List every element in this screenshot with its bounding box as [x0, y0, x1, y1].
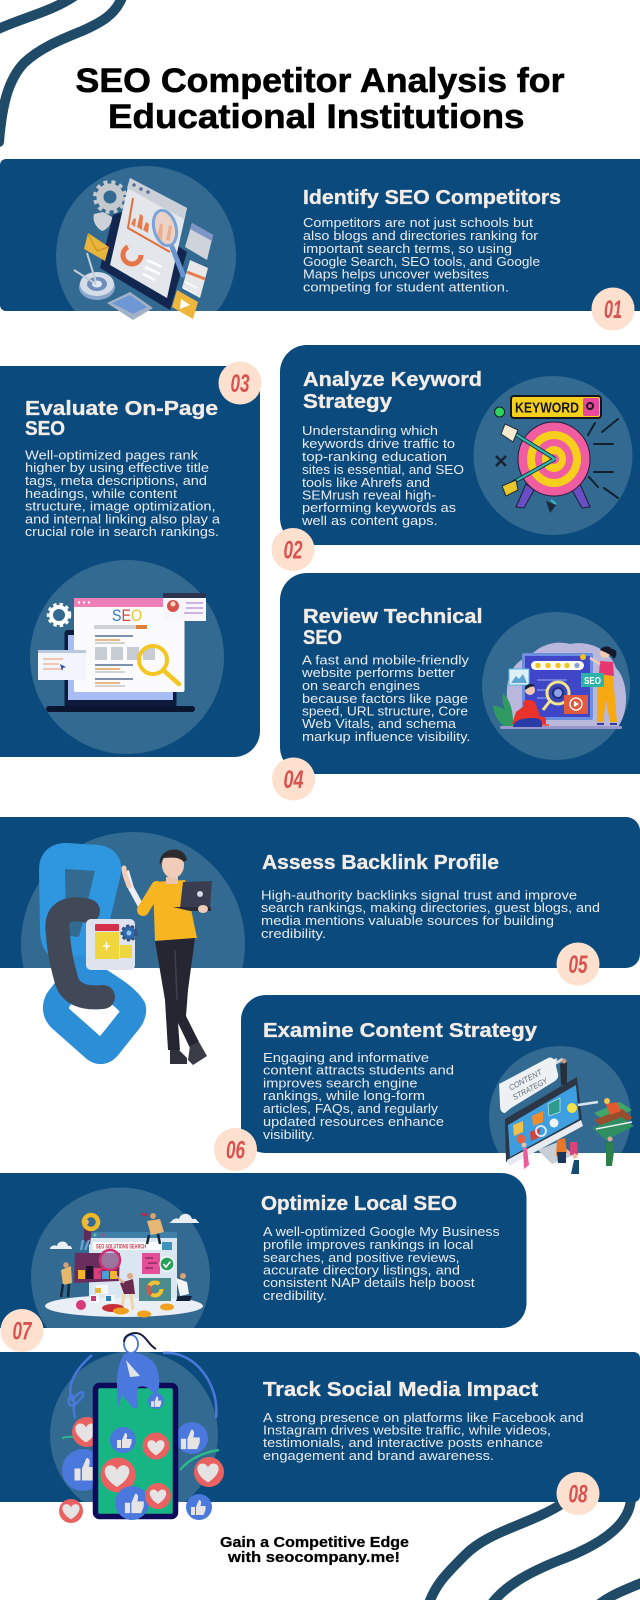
text block: Well-optimized pages rank	[25, 448, 199, 462]
heading	[25, 398, 218, 440]
text block: rankings, while long-form	[263, 1088, 425, 1103]
icon: SEO laptop illustration: SEO	[112, 606, 142, 625]
closing call to action	[220, 1535, 409, 1566]
text block: SEMrush reveal high-	[302, 488, 436, 502]
number badge 03	[218, 362, 262, 404]
text block: performing keywords as	[302, 500, 457, 515]
text block: search rankings, making directories, guest blogs, and	[261, 900, 600, 915]
decorative swirl: bottom right	[428, 1498, 640, 1600]
text block: credibility.	[263, 1288, 327, 1303]
number badge 06: 06	[226, 1136, 246, 1164]
number badge 03: 03	[230, 370, 250, 398]
text block: and internal linking also play a	[25, 512, 221, 526]
number badge 07: 07	[12, 1318, 32, 1346]
text block: tags, meta descriptions, and	[25, 473, 207, 488]
text block: updated resources enhance	[263, 1114, 444, 1129]
panel: 03 evaluate on-page SEO	[0, 362, 262, 757]
heading: SEO	[25, 418, 65, 440]
heading: Track Social Media Impact	[263, 1379, 538, 1401]
text block: consistent NAP details help boost	[263, 1275, 475, 1290]
text block: competing for student attention.	[303, 280, 509, 294]
heading: Review Technical	[303, 606, 482, 628]
icon: local SEO search illustration: SEO SOLUTIONS SEARCH	[96, 1244, 146, 1250]
icon: keyword target illustration	[495, 396, 618, 513]
icon: content strategy illustration: STRATEGY	[511, 1076, 550, 1102]
text block: visibility.	[263, 1127, 315, 1142]
heading	[303, 369, 482, 413]
panel: 08 track social media impact	[0, 1333, 640, 1523]
text block	[261, 888, 600, 941]
text block: Competitors are not just schools but	[303, 215, 533, 230]
text block	[263, 1410, 584, 1463]
text block: searches, and positive reviews,	[263, 1250, 460, 1265]
text block: Web Vitals, and schema	[302, 716, 457, 731]
heading	[303, 606, 482, 649]
icon: local SEO search illustration	[45, 1212, 203, 1318]
icon: keyword target illustration: KEYWORD	[515, 400, 579, 416]
text block	[303, 215, 540, 294]
text block: keywords drive traffic to	[302, 436, 455, 451]
heading: Identify SEO Competitors	[303, 187, 561, 209]
text block: also blogs and directories ranking for	[303, 228, 539, 243]
text block: crucial role in search rankings.	[25, 524, 219, 539]
title: SEO Competitor Analysis for	[76, 62, 564, 100]
text block: A strong presence on platforms like Facebook and	[263, 1410, 584, 1425]
title: Educational Institutions	[108, 98, 524, 136]
text block: accurate directory listings, and	[263, 1262, 460, 1278]
icon: content strategy illustration	[499, 1058, 634, 1174]
text block: High-authority backlinks signal trust and improve	[261, 888, 577, 902]
text block	[263, 1050, 454, 1142]
text block: content attracts students and	[263, 1062, 454, 1078]
text block: testimonials, and interactive posts enhance	[263, 1435, 543, 1450]
number badge 08	[556, 1472, 600, 1515]
text block: speed, URL structure, Core	[302, 704, 468, 718]
text block: A well-optimized Google My Business	[263, 1224, 500, 1239]
icon: SEO laptop illustration	[38, 593, 206, 712]
text block: website performs better	[301, 665, 456, 680]
panel: 05 assess backlink profile	[0, 817, 640, 1065]
number badge 04: 04	[284, 766, 304, 794]
panel: 04 review technical SEO	[272, 573, 640, 800]
number badge 06	[214, 1128, 257, 1171]
closing call to action: with seocompany.me!	[227, 1550, 400, 1566]
text block: improves search engine	[263, 1076, 418, 1090]
decorative swirl: top left	[0, 0, 123, 142]
number badge 02	[272, 528, 314, 571]
heading: Examine Content Strategy	[263, 1020, 538, 1042]
number badge 08: 08	[568, 1480, 588, 1508]
heading: Strategy	[303, 391, 393, 413]
icon: social media phone illustration	[59, 1333, 224, 1523]
text block: well as content gaps.	[301, 513, 438, 528]
text block: profile improves rankings in local	[263, 1237, 474, 1252]
number badge 07	[0, 1309, 44, 1352]
number badge 05	[556, 942, 600, 986]
number badge 02: 02	[284, 536, 303, 564]
text block: headings, while content	[25, 486, 177, 501]
icon: analytics dashboard illustration	[74, 178, 213, 320]
text block: Understanding which	[302, 423, 438, 438]
closing call to action: Gain a Competitive Edge	[220, 1535, 409, 1551]
icon: chain link and person illustration	[52, 849, 212, 1065]
text block: A fast and mobile-friendly	[302, 652, 470, 668]
text block: markup influence visibility.	[302, 729, 470, 744]
text block: higher by using effective title	[25, 460, 209, 475]
text block: Instagram drives website traffic, while videos,	[263, 1422, 551, 1438]
text block: because factors like page	[302, 691, 468, 706]
text block: credibility.	[261, 926, 326, 941]
text block: top-ranking education	[302, 449, 447, 464]
number badge 04	[272, 758, 315, 800]
panel: 02 analyze keyword strategy	[272, 345, 640, 571]
panel: 01 identify SEO competitors	[0, 159, 640, 346]
text block	[263, 1224, 500, 1303]
heading: Evaluate On-Page	[25, 398, 218, 420]
text block: on search engines	[302, 678, 421, 693]
text block: Google Search, SEO tools, and Google	[303, 254, 540, 269]
text block: Engaging and informative	[263, 1050, 429, 1065]
text block: articles, FAQs, and regularly	[263, 1101, 439, 1116]
text block: media mentions valuable sources for building	[261, 913, 554, 928]
panel: 07 optimize local SEO	[0, 1173, 526, 1366]
number badge 01: 01	[604, 296, 622, 324]
text block: structure, image optimization,	[25, 498, 216, 514]
icon: technical SEO illustration: SEO	[584, 676, 601, 687]
number badge 05: 05	[568, 951, 588, 979]
text block: tools like Ahrefs and	[302, 475, 430, 490]
text block: engagement and brand awareness.	[263, 1448, 494, 1463]
text block: sites is essential, and SEO	[302, 462, 464, 477]
heading: Assess Backlink Profile	[262, 852, 499, 874]
heading: Optimize Local SEO	[261, 1193, 457, 1215]
text block: important search terms, so using	[303, 241, 512, 256]
heading: Analyze Keyword	[303, 369, 482, 391]
text block	[301, 652, 470, 744]
text block	[25, 448, 221, 539]
number badge 01	[592, 288, 634, 330]
icon: content strategy illustration: CONTENT	[507, 1067, 544, 1093]
panel: 06 examine content strategy	[214, 995, 640, 1188]
heading: SEO	[303, 627, 342, 649]
title	[76, 62, 564, 136]
text block	[301, 423, 464, 528]
text block: Maps helps uncover websites	[303, 266, 490, 282]
icon: technical SEO illustration	[493, 643, 626, 729]
